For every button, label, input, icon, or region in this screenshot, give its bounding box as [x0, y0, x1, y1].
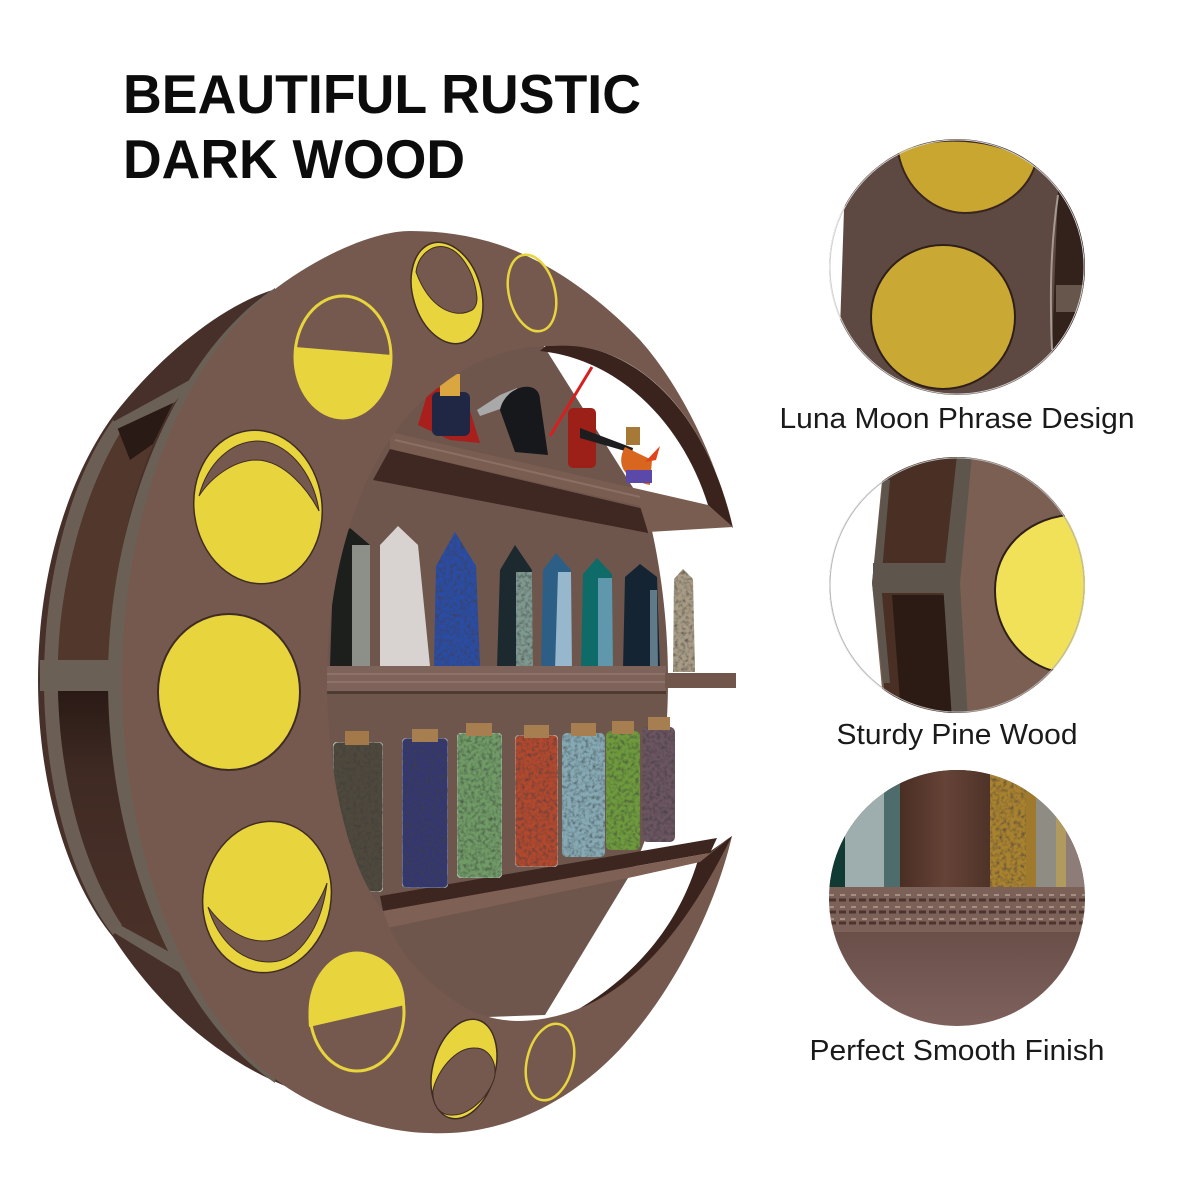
middle shelf — [326, 666, 736, 694]
moon: lower gibbous — [191, 811, 343, 983]
detail label: smooth finish: Perfect Smooth Finish — [810, 1035, 1104, 1067]
detail circle: pine wood — [829, 457, 1085, 713]
title: DARK WOOD — [123, 128, 465, 190]
moon phases — [158, 233, 582, 1127]
back panel — [300, 340, 668, 1020]
crystal points — [330, 526, 695, 672]
title — [123, 63, 641, 190]
crystal chip vials — [333, 717, 675, 892]
rim dividers — [40, 288, 300, 1083]
moon: lower half — [309, 952, 405, 1071]
moon: upper half — [295, 296, 392, 419]
detail label: pine wood: Sturdy Pine Wood — [836, 719, 1078, 751]
lego figures — [418, 367, 660, 485]
detail circle: moon phase design — [829, 139, 1090, 400]
moon shelf product — [38, 231, 736, 1133]
rear rim of shelf — [38, 288, 300, 1088]
inner dark arcs — [540, 344, 733, 1014]
crescent front face — [122, 231, 733, 1133]
bottom shelf — [380, 836, 732, 928]
detail label: moon phase: Luna Moon Phrase Design — [780, 403, 1134, 435]
moon: lower new — [518, 1019, 582, 1105]
detail circle: smooth finish — [829, 770, 1090, 1028]
moon: lower crescent — [420, 1011, 508, 1127]
moon: upper gibbous — [184, 422, 332, 592]
title: BEAUTIFUL RUSTIC — [123, 63, 641, 125]
moon: upper crescent — [399, 233, 495, 353]
moon: upper new — [500, 250, 564, 336]
moon: full — [158, 614, 300, 770]
top shelf — [373, 432, 733, 533]
